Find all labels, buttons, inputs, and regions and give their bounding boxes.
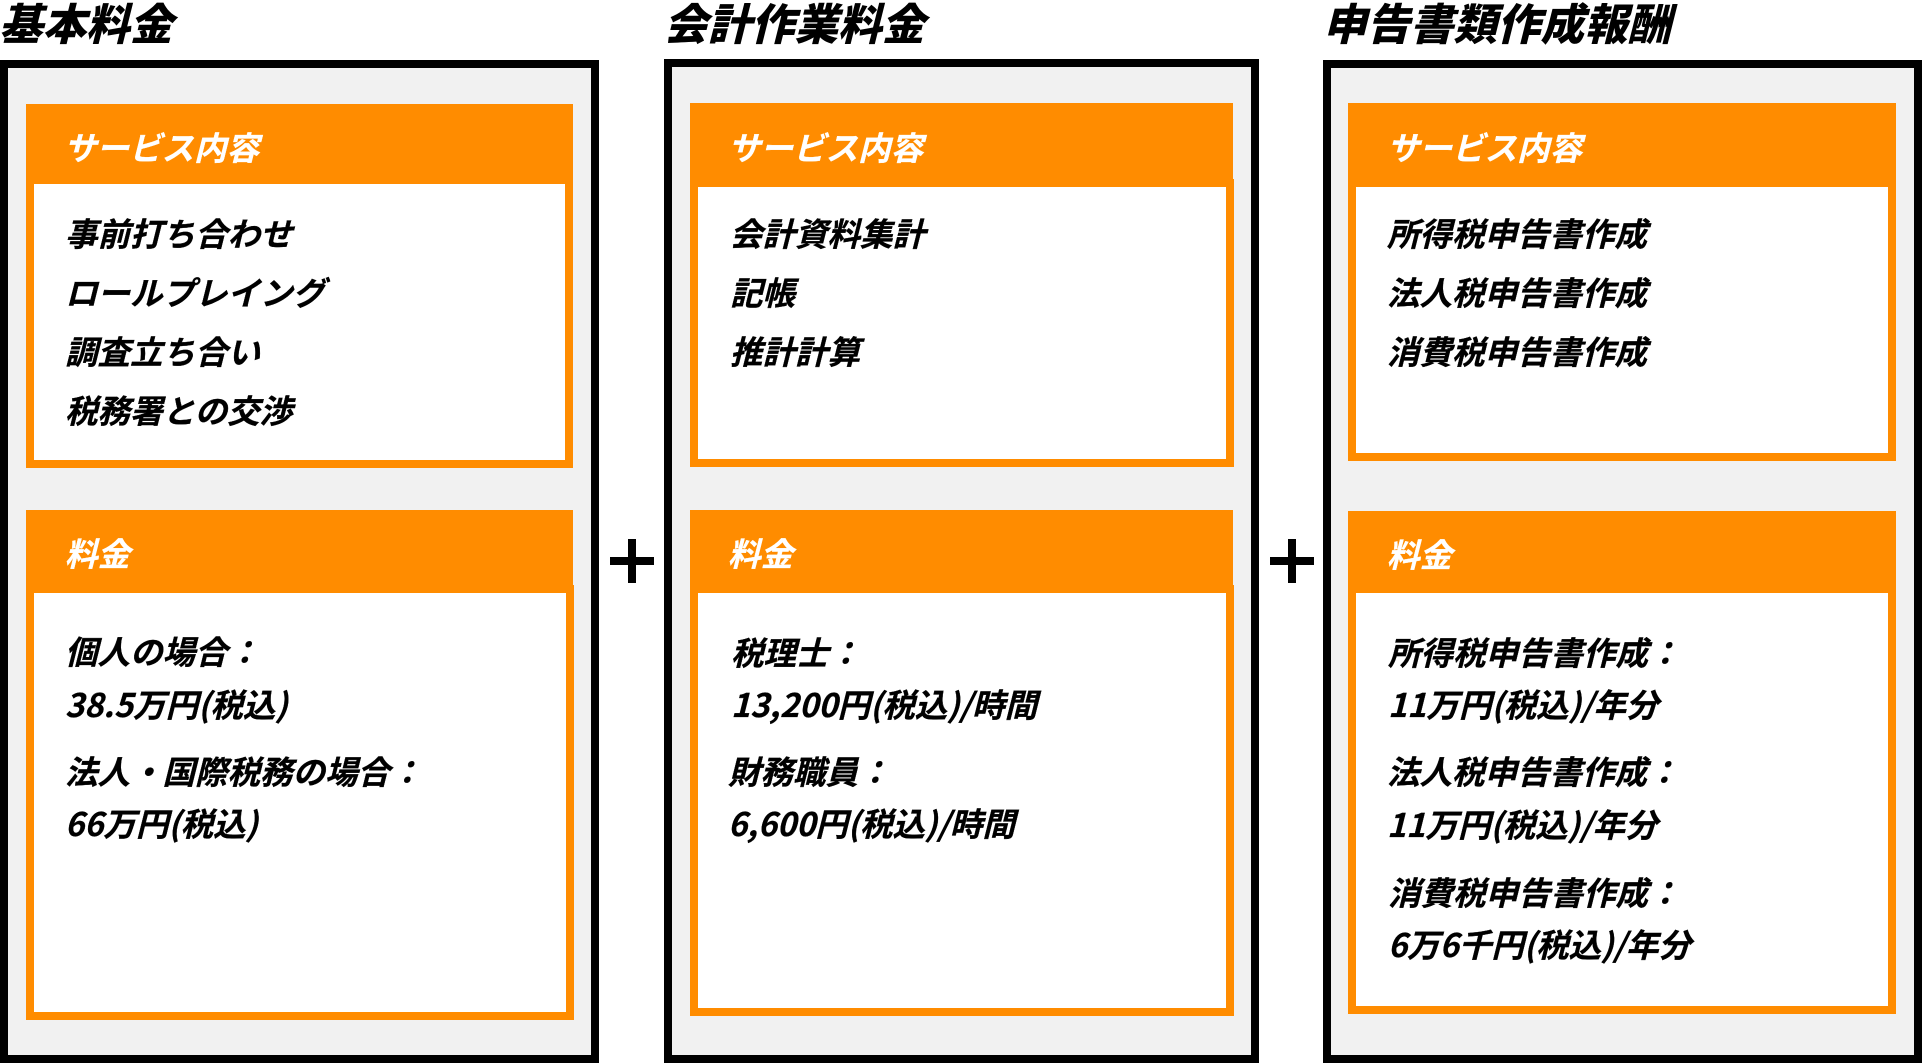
fee amount: 6万6千円(税込)/年分	[1388, 920, 1691, 967]
list item: 記帳	[730, 268, 795, 315]
icon: plus sign 1	[610, 539, 654, 583]
card body: services list	[1356, 187, 1888, 453]
fee text: 法人税申告書作成：	[1387, 747, 1680, 794]
card header: services: サービス内容	[728, 123, 923, 170]
fee amount: 13,200円(税込)/時間	[731, 680, 1037, 727]
card body: fee list	[26, 585, 574, 1020]
list item: 消費税申告書作成	[1387, 327, 1647, 374]
card: accounting prices	[690, 510, 1234, 1016]
card body: fee list	[1356, 593, 1888, 1006]
list item: ロールプレイング	[65, 268, 325, 315]
card header: fee: 料金	[728, 529, 793, 576]
icon: plus sign 2	[1270, 539, 1314, 583]
card header: services: サービス内容	[64, 123, 259, 170]
list item: 法人税申告書作成	[1387, 268, 1647, 315]
card header: fee: 料金	[65, 529, 130, 576]
fee text: 個人の場合：	[65, 627, 260, 674]
card: accounting services	[690, 103, 1234, 467]
card body: services list	[690, 179, 1234, 467]
fee amount: 11万円(税込)/年分	[1387, 800, 1658, 847]
card body: fee list	[690, 585, 1234, 1016]
card body: services list	[34, 184, 565, 460]
list item: 会計資料集計	[730, 209, 925, 256]
card: basic fee services	[26, 104, 573, 468]
list item: 税務署との交渉	[65, 386, 292, 433]
panel: tax return preparation fee	[1323, 60, 1922, 1063]
card header: fee: 料金	[1387, 530, 1452, 577]
fee amount: 38.5万円(税込)	[65, 680, 288, 727]
fee text: 所得税申告書作成：	[1388, 628, 1681, 675]
list item: 所得税申告書作成	[1387, 209, 1647, 256]
panel: basic fee	[0, 60, 599, 1063]
fee text: 法人・国際税務の場合：	[65, 747, 423, 794]
panel: accounting work fee	[664, 59, 1259, 1063]
card: basic fee prices	[26, 510, 574, 1020]
card header: services: サービス内容	[1387, 123, 1582, 170]
fee amount: 6,600円(税込)/時間	[728, 799, 1015, 846]
card header: fee	[26, 510, 573, 593]
fee text: 消費税申告書作成：	[1388, 868, 1681, 915]
fee text: 財務職員：	[728, 747, 891, 794]
card: tax return services	[1348, 103, 1896, 461]
fee text: 税理士：	[731, 628, 861, 675]
list item: 推計計算	[730, 327, 860, 374]
card: tax return prices	[1348, 511, 1896, 1014]
fee amount: 11万円(税込)/年分	[1388, 680, 1658, 727]
card header: fee	[690, 510, 1233, 593]
list item: 事前打ち合わせ	[65, 209, 293, 256]
fee amount: 66万円(税込)	[65, 799, 258, 846]
list item: 調査立ち合い	[65, 327, 260, 374]
card header: services	[690, 103, 1233, 187]
